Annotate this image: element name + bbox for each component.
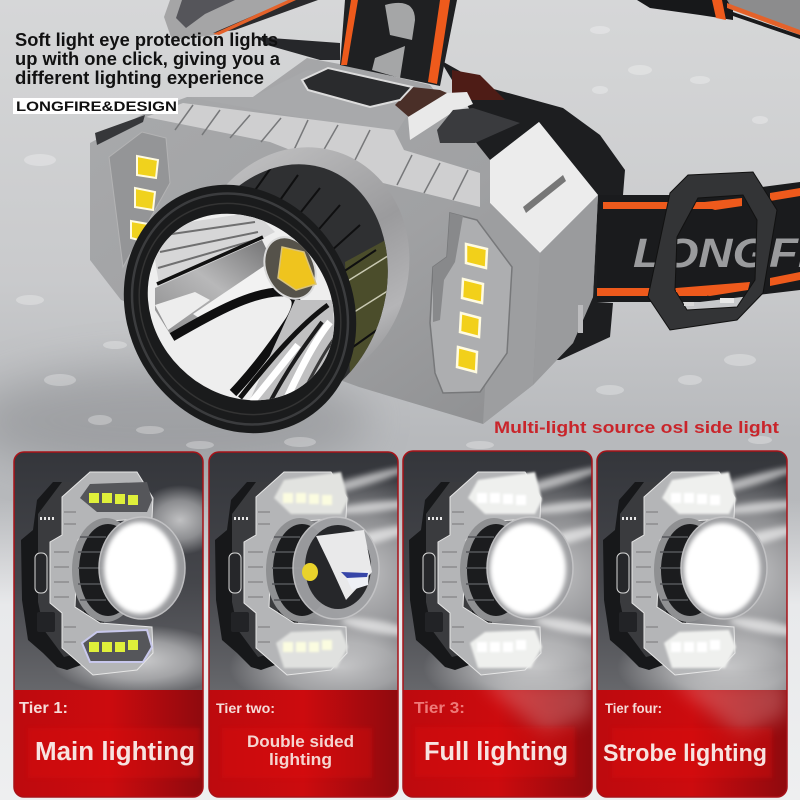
black outer ring [79,142,401,476]
tier name: Strobe lighting [603,740,767,767]
top head strap [164,0,800,40]
lamp illustration [21,472,185,675]
heading text: Soft light eye protection lights [15,29,278,50]
strap buckle [648,172,777,330]
heading text: different lighting experience [15,67,264,88]
panel: tier 4 strobe lighting [597,451,800,797]
lamp illustration [215,472,379,675]
silver collar [160,119,440,417]
tier label: Tier 1: [19,700,68,717]
vertical rear strap [340,0,457,86]
panel: tier 3 full lighting [402,450,593,798]
tier label: Tier four: [605,700,662,716]
tier name: Full lighting [424,738,568,766]
tier name: Main lighting [35,738,195,766]
brand label: LONGFIRE&DESIGN [16,98,177,114]
tier label: Tier 3: [414,700,465,717]
white block by switch [408,92,473,140]
red subheading: Multi-light source osl side light [494,418,779,437]
right angled white facet [490,122,598,253]
tier label: Tier two: [216,700,275,716]
left dark edge [95,115,145,145]
top ridge [146,103,480,207]
yellow LED [278,247,316,290]
tier name: Double sided [247,733,354,751]
reflector [148,214,334,400]
lamp illustration [409,472,573,675]
right side light panel [430,213,512,393]
lamp illustration [603,472,767,675]
panel: tier 1 main lighting [13,451,204,798]
area behind top socket [395,87,447,118]
main front lens [124,147,410,434]
switch button [437,108,520,143]
right side strap with logo: LONGFI [633,230,800,276]
left side light panel [109,132,170,267]
tier name [247,733,354,769]
headlamp main body [90,58,598,424]
ribbed barrel [239,164,388,381]
dark back shell and strap of the headlamp [257,37,625,360]
heading text [15,29,281,88]
top socket [302,68,412,107]
tier name: lighting [269,751,332,769]
heading text: up with one click, giving you a [15,48,281,69]
right side strap with logo [597,182,800,302]
panel: tier 2 double sided lighting [208,451,399,798]
